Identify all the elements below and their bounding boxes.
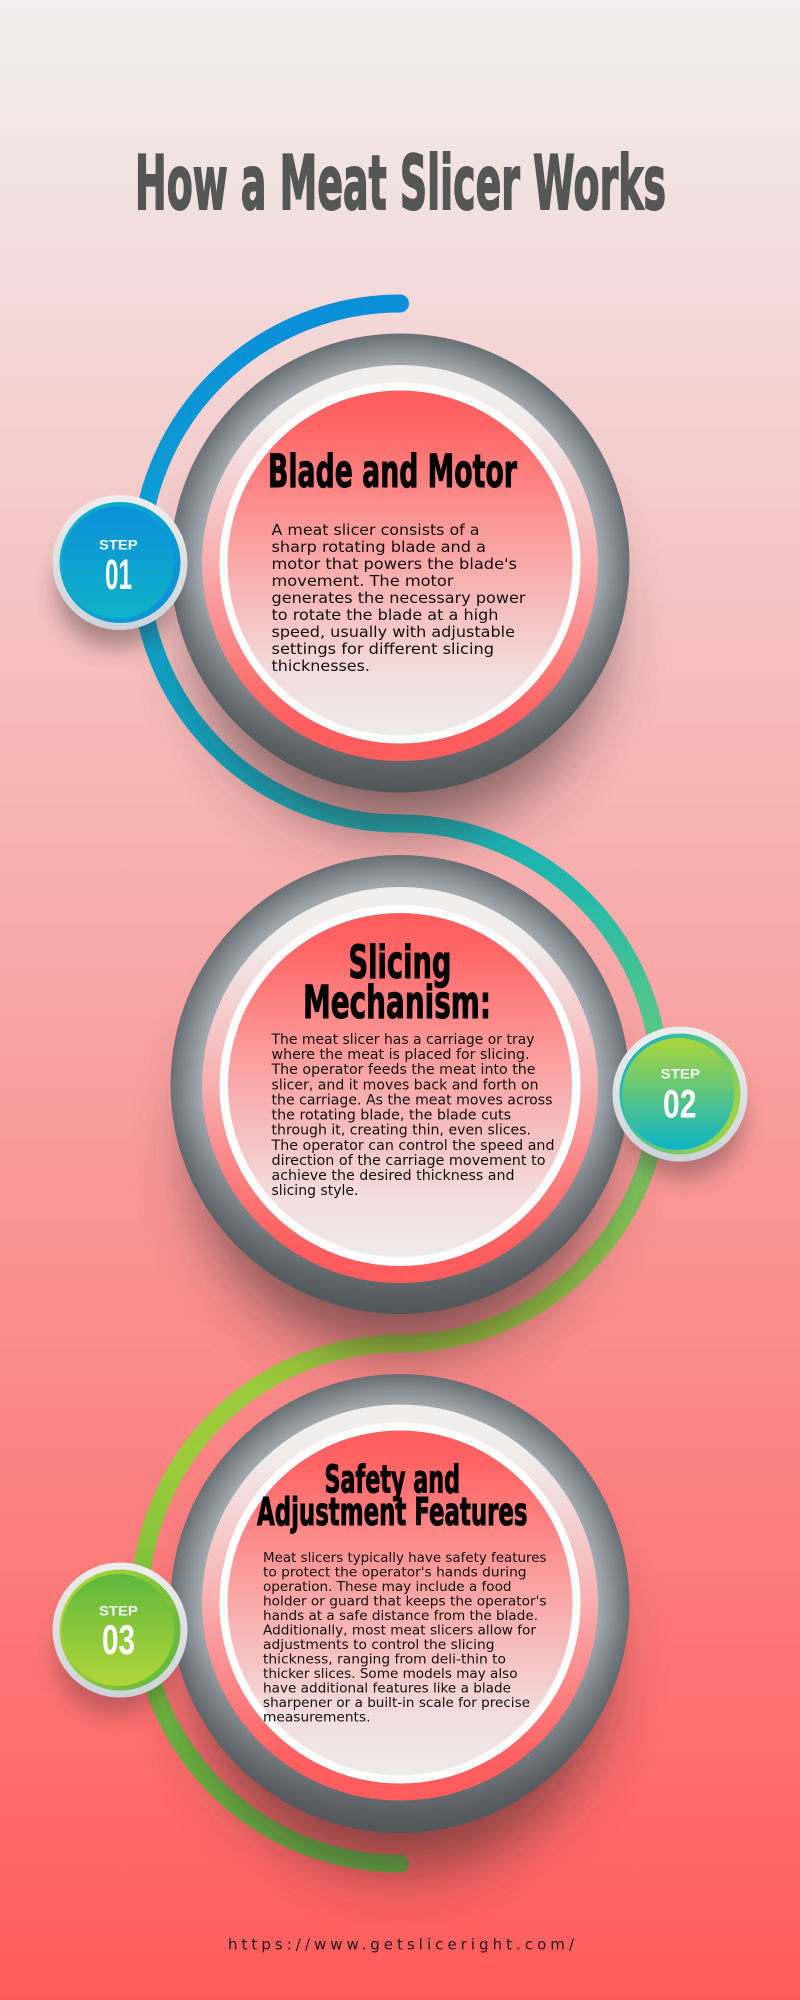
text block: slicing mechanism: the carriage. As the meat moves across	[272, 1093, 552, 1109]
text block: blade and motor: speed, usually with adjustable	[272, 623, 515, 641]
text block: safety and adjustment features: holder or guard that keeps the operator's	[263, 1594, 546, 1610]
text block: blade and motor: sharp rotating blade and a	[272, 538, 486, 556]
badge: step 01: 01	[105, 551, 132, 599]
badge: step 02	[612, 1026, 748, 1179]
panel: step 1 circle	[170, 334, 630, 792]
text block: blade and motor: generates the necessary power	[272, 589, 526, 607]
text block: blade and motor: thicknesses.	[272, 657, 370, 675]
text block: safety and adjustment features: Meat slicers typically have safety features	[263, 1550, 546, 1566]
panel: step 3 circle	[170, 1374, 630, 1833]
text block: safety and adjustment features: Additionally, most meat slicers allow for	[263, 1622, 536, 1638]
text block: slicing mechanism: through it, creating thin, even slices.	[272, 1123, 531, 1139]
text block: blade and motor: motor that powers the blade's	[272, 555, 517, 573]
text block: slicing mechanism: achieve the desired thickness and	[272, 1168, 514, 1184]
text block: safety and adjustment features: have additional features like a blade	[263, 1680, 511, 1696]
text block: safety and adjustment features: thickness, ranging from deli-thin to	[263, 1652, 506, 1668]
drop shadows of the circles	[195, 416, 605, 1870]
badge: step 01: STEP	[99, 538, 138, 553]
text block: safety and adjustment features: sharpener or a built-in scale for precise	[263, 1695, 530, 1711]
heading: slicing mechanism: Mechanism:	[303, 976, 491, 1029]
text block: slicing mechanism: slicing style.	[272, 1183, 358, 1199]
heading: slicing mechanism: Slicing	[348, 936, 452, 989]
text block: safety and adjustment features	[263, 1550, 546, 1726]
text block: safety and adjustment features: adjustments to control the slicing	[263, 1637, 494, 1653]
badge: step 02: 02	[663, 1083, 696, 1127]
text block: blade and motor: settings for different slicing	[272, 640, 494, 658]
badge: step 03: STEP	[99, 1604, 138, 1619]
badge: step 03: 03	[102, 1616, 135, 1663]
badge: step 03	[52, 1562, 188, 1715]
text block: slicing mechanism	[270, 1032, 554, 1199]
panel: step 2 circle	[170, 855, 630, 1314]
text block: blade and motor: A meat slicer consists of a	[272, 521, 480, 539]
heading: safety and adjustment features: Safety and	[324, 1458, 460, 1502]
text block: safety and adjustment features: operation. These may include a food	[263, 1579, 512, 1595]
text block: safety and adjustment features: thicker slices. Some models may also	[263, 1666, 518, 1682]
text block: blade and motor: to rotate the blade at a high	[272, 606, 498, 624]
text block: safety and adjustment features: hands at a safe distance from the blade.	[263, 1608, 538, 1624]
connector path linking the three steps	[140, 304, 660, 1864]
text block: safety and adjustment features: measurements.	[263, 1710, 370, 1726]
badge: step 02: STEP	[661, 1067, 700, 1082]
text block: safety and adjustment features: to protect the operator's hands during	[263, 1564, 526, 1580]
text block: slicing mechanism: The meat slicer has a carriage or tray	[271, 1032, 534, 1048]
heading: slicing mechanism	[303, 936, 491, 1029]
text block: slicing mechanism: the rotating blade, the blade cuts	[272, 1108, 511, 1124]
badge: step 01	[52, 495, 188, 648]
text block: slicing mechanism: direction of the carriage movement to	[272, 1153, 546, 1169]
text block: blade and motor: movement. The motor	[272, 572, 454, 590]
heading: safety and adjustment features	[257, 1458, 528, 1534]
footer url: https://www.getsliceright.com/	[228, 1936, 575, 1954]
text block: slicing mechanism: slicer, and it moves back and forth on	[272, 1077, 538, 1093]
heading: safety and adjustment features: Adjustment Features	[257, 1490, 528, 1534]
text block: slicing mechanism: The operator can control the speed and	[270, 1138, 554, 1154]
heading: blade and motor: Blade and Motor	[268, 445, 517, 498]
text block: blade and motor	[272, 521, 526, 675]
text block: slicing mechanism: The operator feeds the meat into the	[270, 1062, 536, 1078]
text block: slicing mechanism: where the meat is placed for slicing.	[272, 1047, 530, 1063]
